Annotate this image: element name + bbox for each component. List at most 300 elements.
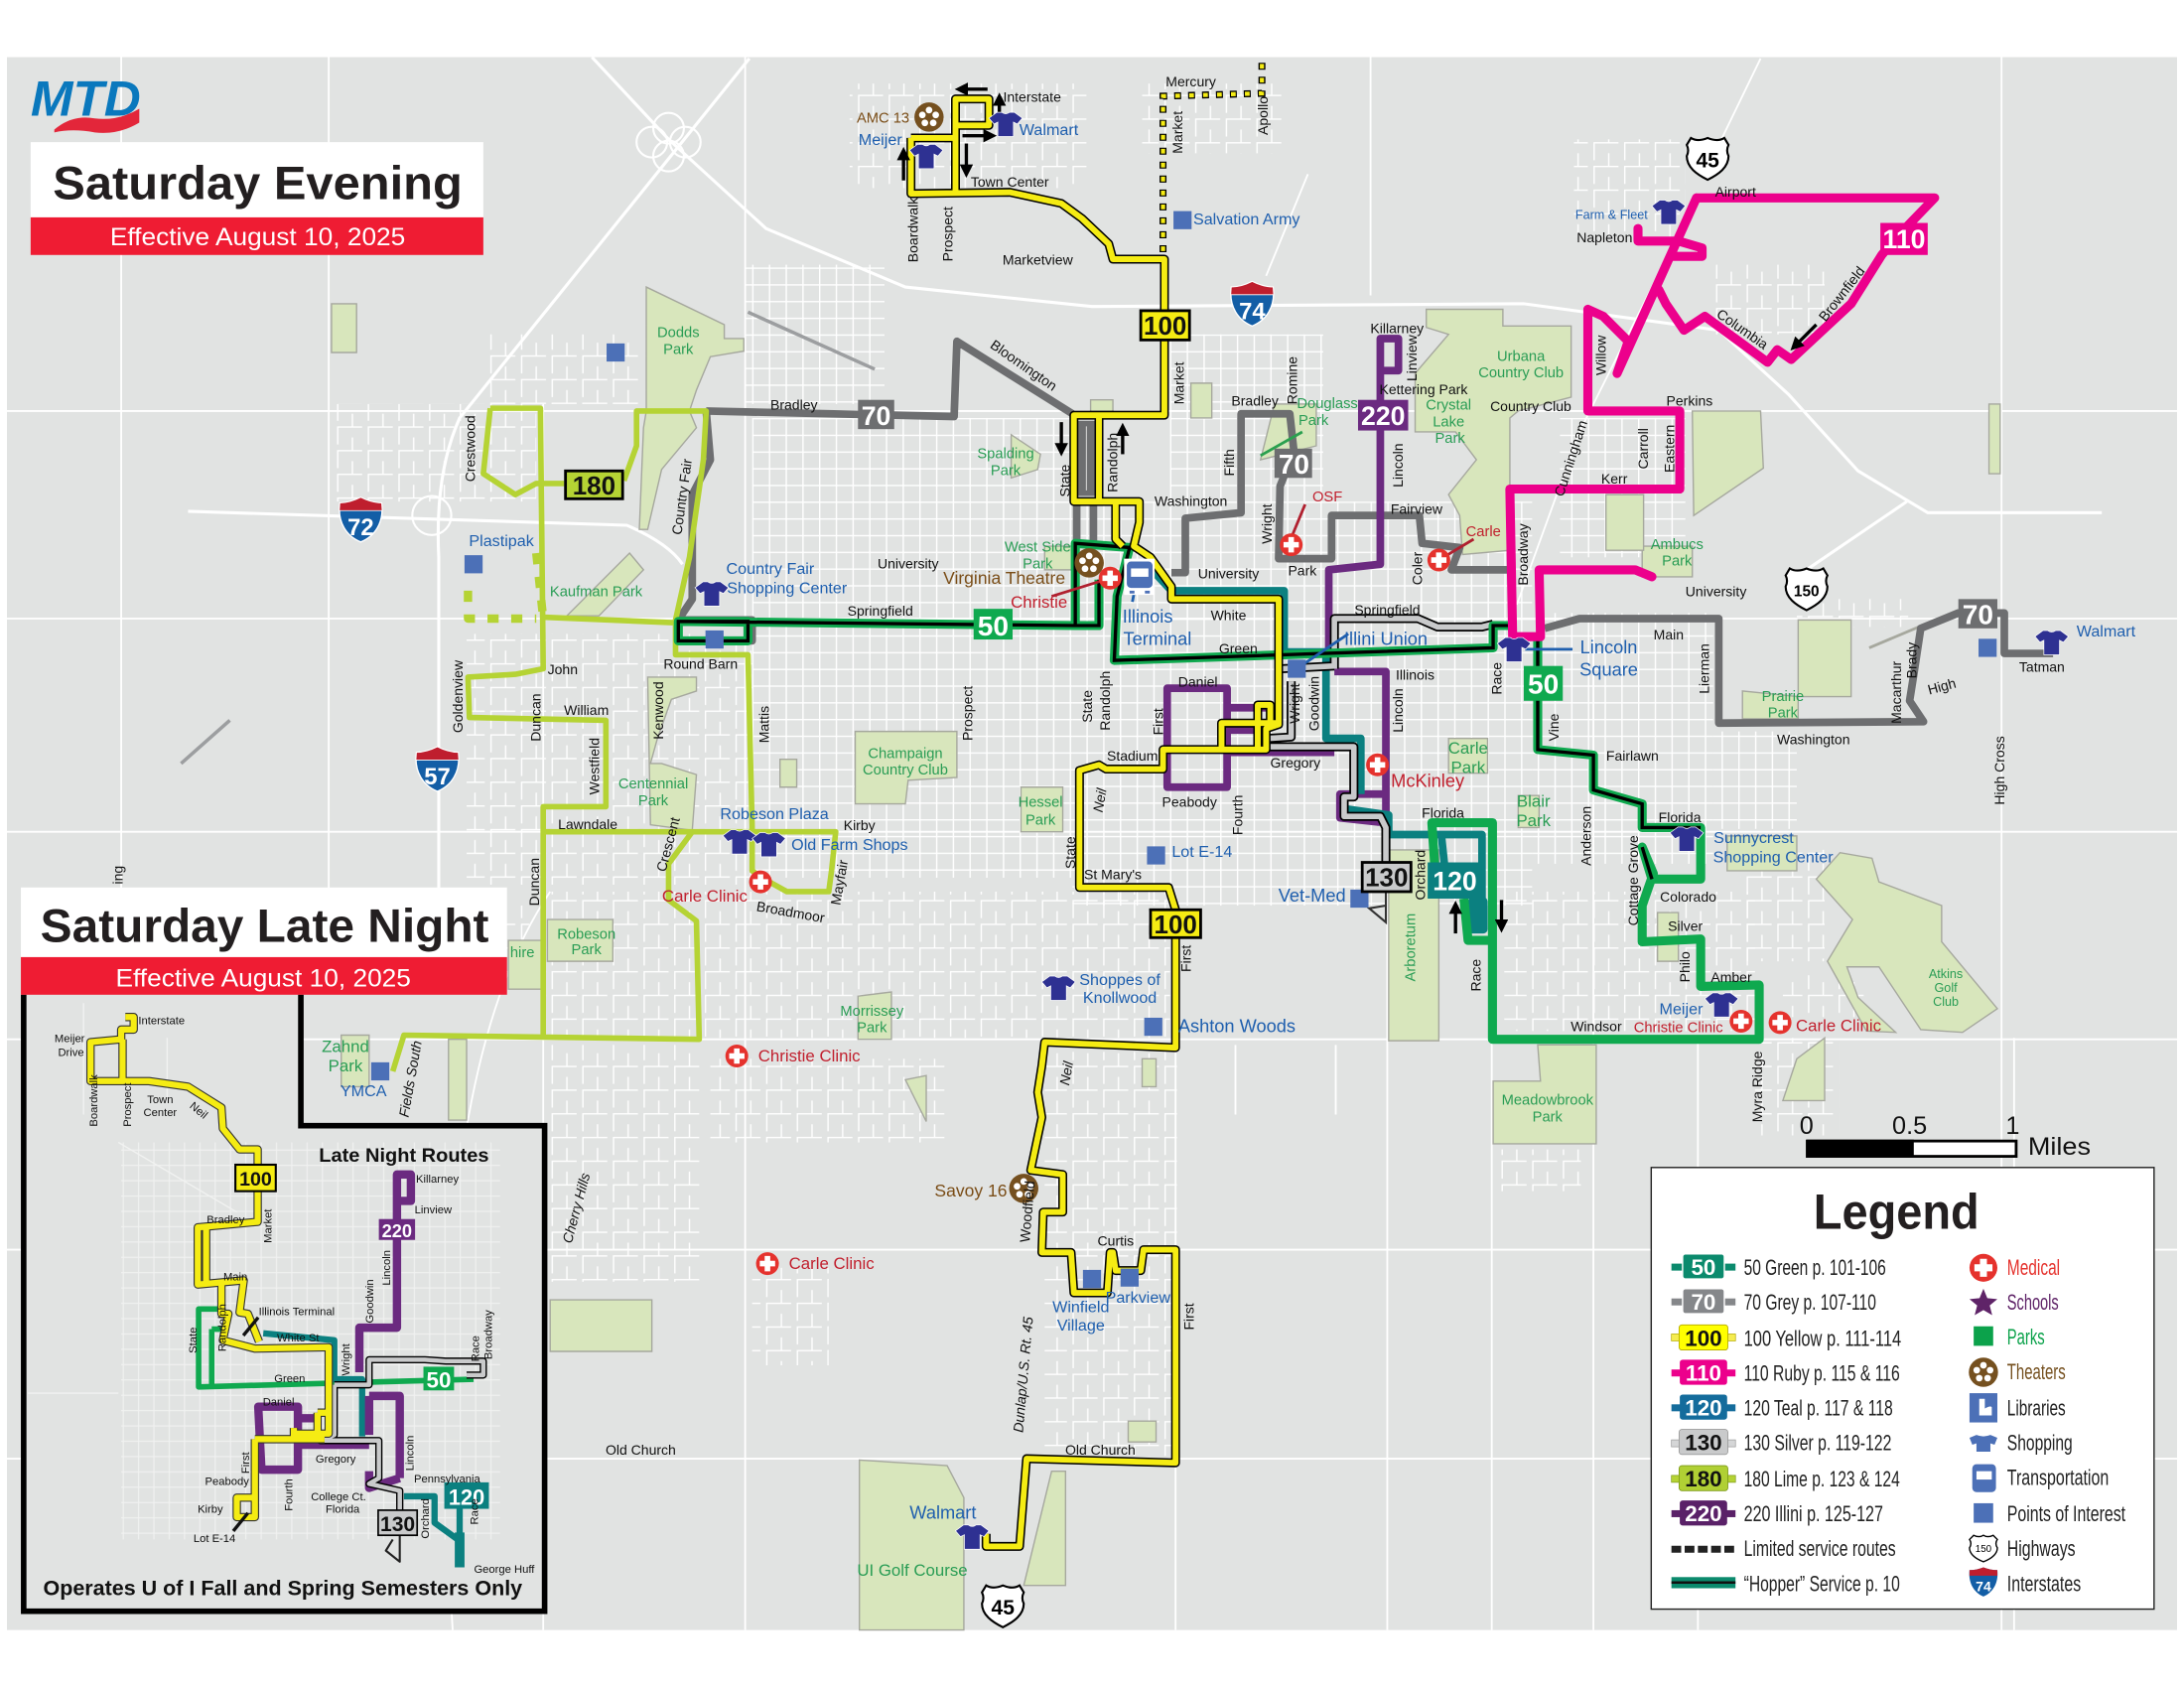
street labels: Florida (1422, 805, 1464, 821)
street labels: Duncan (527, 693, 543, 742)
inset street labels: College Ct. (311, 1491, 366, 1503)
street labels: Curtis (1098, 1232, 1134, 1248)
inset street labels: Killarney (416, 1174, 459, 1186)
street labels: Fairlawn (1606, 748, 1659, 764)
inset street labels: Drive (58, 1048, 84, 1059)
inset street labels: Main (223, 1271, 247, 1283)
street labels: Philo (1677, 951, 1693, 982)
street labels: Apollo (1255, 96, 1271, 135)
inset street labels: Randolph (216, 1304, 228, 1351)
icon: transit center (1124, 559, 1155, 595)
place labels: shopping and points of interest: Plastipak (469, 532, 535, 550)
street labels: Broadmoor (755, 898, 826, 925)
route 130 silver (1268, 619, 1493, 922)
street labels: Fourth (1230, 795, 1246, 835)
legend symbol text: Highways (2007, 1536, 2076, 1561)
street labels: Myra Ridge (1749, 1051, 1765, 1122)
inset route labels: 120 (449, 1484, 484, 1509)
street labels: Country Fair (668, 458, 695, 536)
place labels: parks: Blair (1517, 791, 1551, 810)
highway shields: 45 (1696, 149, 1719, 172)
shopping icons (695, 112, 2069, 1549)
theaters (914, 102, 1104, 1203)
place labels: parks: Prairie (1762, 689, 1804, 705)
street labels: Daniel (1178, 674, 1217, 690)
route number labels: 70 (1279, 449, 1309, 480)
street labels: Mattis (755, 706, 771, 743)
route number labels (566, 223, 1997, 939)
street labels: University (1686, 584, 1746, 600)
inset street labels: Prospect (122, 1082, 134, 1127)
place labels: shopping and points of interest: Lincoln (1580, 636, 1637, 657)
place labels: shopping and points of interest: Robeson Plaza (720, 805, 829, 823)
place labels: parks: Park (638, 793, 669, 809)
place labels: shopping and points of interest: Knollwood (1083, 989, 1157, 1007)
inset street labels: Town (147, 1094, 173, 1106)
place labels: shopping and points of interest: Shopping Center (1713, 849, 1834, 867)
place labels: shopping and points of interest: Meijer (859, 131, 902, 149)
place labels: medical (662, 490, 1881, 1273)
street labels: Willow (1593, 335, 1609, 375)
legend route text: 120 Teal p. 117 & 118 (1744, 1396, 1893, 1421)
street labels: Neil (1090, 786, 1110, 813)
inset street labels: Pennsylvania (414, 1474, 481, 1485)
scale bar: 1 (2005, 1112, 2019, 1140)
place labels: medical: Christie Clinic (1634, 1021, 1723, 1037)
route number labels: 220 (1361, 401, 1405, 431)
place labels: shopping and points of interest (341, 121, 2136, 1522)
place labels: parks: Country Club (863, 763, 948, 778)
inset street labels: Meijer (55, 1034, 85, 1046)
route 120 teal (1154, 571, 1487, 933)
highway shields: 74 (1239, 298, 1266, 325)
route number labels: 100 (1155, 912, 1197, 939)
street labels: Tatman (2019, 658, 2065, 674)
street labels: St Mary's (1084, 866, 1142, 882)
place labels: parks: Park (1451, 759, 1486, 777)
street labels: Lincoln (1390, 443, 1406, 488)
legend symbol text: Schools (2007, 1290, 2059, 1315)
route number labels: 100 (1144, 313, 1186, 341)
inset street labels: First (240, 1451, 252, 1474)
street labels: Airport (1715, 184, 1756, 200)
legend route badges: 100 (1685, 1326, 1722, 1350)
route number labels: 50 (1528, 669, 1559, 700)
place labels: medical: Christie (1011, 593, 1067, 612)
street labels: Old Church (606, 1442, 676, 1458)
street labels: Windsor (1570, 1018, 1622, 1034)
street labels: Kettering Park (1380, 381, 1468, 397)
street labels: State (1079, 690, 1095, 723)
highway shields: 45 (992, 1597, 1015, 1619)
title: Saturday Evening: Effective August 10, 2025 (110, 223, 405, 251)
inset street labels: Wright (341, 1342, 352, 1376)
inset street labels: Center (144, 1107, 177, 1119)
place labels: parks: Lake (1433, 414, 1464, 430)
legend symbol text: Transportation (2007, 1466, 2109, 1490)
place labels: shopping and points of interest: Walmart (1020, 121, 1079, 139)
street labels: Wright (1287, 683, 1302, 724)
place labels: parks: Zahnd (322, 1037, 369, 1055)
street labels: Round Barn (663, 655, 738, 671)
street labels: Romine (1284, 356, 1299, 404)
place labels: parks: Centennial (618, 776, 688, 792)
street labels: Linview (1404, 334, 1420, 381)
street labels: High Cross (1991, 736, 2007, 805)
street labels: First (1180, 1303, 1196, 1331)
street labels: ing (109, 866, 125, 885)
place labels: shopping and points of interest: Walmart (2077, 623, 2136, 640)
place labels: parks: Park (1298, 413, 1329, 429)
street labels: Race (1467, 959, 1483, 992)
place labels: parks: Dodds (657, 326, 700, 342)
place labels: shopping and points of interest: Old Farm Shops (791, 836, 908, 854)
place labels: parks: Country Club (1478, 365, 1564, 381)
street labels: Westfield (586, 738, 602, 794)
inset street labels: Neil (188, 1100, 209, 1122)
inset route labels: 50 (426, 1367, 451, 1392)
place labels: parks: Robeson (557, 927, 615, 943)
street labels: William (564, 702, 609, 718)
street labels: Crescent (653, 815, 683, 874)
place labels: shopping and points of interest: Farm & Fleet (1575, 208, 1648, 221)
street labels: Crestwood (462, 415, 478, 482)
street labels: Bradley (1231, 392, 1279, 408)
street labels: Randolph (1104, 433, 1120, 492)
title: Saturday Evening: Saturday Evening (53, 158, 463, 211)
inset route lines (90, 1017, 483, 1567)
route number labels: 180 (573, 473, 615, 500)
legend route text: 130 Silver p. 119-122 (1744, 1431, 1891, 1456)
street labels: Goodwin (1306, 676, 1322, 731)
place labels: parks: Atkins (1929, 967, 1963, 981)
legend route badges: 110 (1686, 1360, 1721, 1385)
street labels: University (1198, 565, 1259, 581)
logo: MTD: MTD (31, 70, 141, 126)
legend route text (1744, 1255, 1901, 1596)
legend symbol text: Shopping (2007, 1431, 2073, 1456)
street labels: Goldenview (450, 659, 466, 733)
inset street labels: Boardwalk (88, 1074, 100, 1127)
street labels: Lincoln (1390, 688, 1406, 733)
street labels: Cherry Hills (559, 1172, 593, 1245)
place labels: shopping and points of interest: Parkview (1106, 1289, 1170, 1307)
street labels: Broadway (1515, 523, 1531, 586)
inset street labels: White St (277, 1333, 320, 1344)
street labels: Bloomington (988, 337, 1060, 394)
inset street labels: Daniel (263, 1397, 295, 1409)
title: Saturday Late Night (21, 888, 507, 995)
street labels: Colorado (1660, 889, 1716, 905)
street labels: First (1178, 945, 1194, 972)
place labels: parks: Meadowbrook (1502, 1093, 1594, 1109)
street labels: Old Church (1065, 1442, 1136, 1458)
place labels: parks: Park (329, 1056, 363, 1075)
street labels: Prospect (940, 207, 956, 261)
place labels: parks: Carle (1448, 739, 1488, 758)
inset street labels: Florida (326, 1504, 360, 1516)
place labels: parks: West Side (1005, 540, 1071, 556)
legend symbol text: Points of Interest (2007, 1501, 2125, 1526)
place labels: shopping and points of interest: Walmart (909, 1501, 976, 1522)
place labels: parks: Park (1516, 811, 1552, 830)
place labels: parks: Park (572, 942, 602, 958)
street labels: Neil (1056, 1059, 1076, 1086)
inset street labels: Market (263, 1208, 275, 1243)
leader lines (1051, 432, 1572, 668)
street labels: Fifth (1221, 449, 1237, 476)
highway shields: 72 (347, 514, 374, 541)
street labels: Park (1288, 562, 1317, 578)
street labels: Mayfair (827, 858, 851, 907)
inset street labels: Lincoln (381, 1250, 393, 1286)
street labels: State (1057, 465, 1073, 496)
legend route badges: 180 (1685, 1467, 1722, 1491)
place labels: shopping and points of interest: Terminal (1124, 629, 1191, 649)
place labels: parks: Park (857, 1021, 887, 1037)
inset street labels: Linview (415, 1204, 453, 1216)
inset street labels: Illinois Terminal (259, 1307, 335, 1319)
street labels: Lierman (1697, 643, 1712, 694)
street labels: Race (1489, 662, 1504, 695)
place labels: parks: Spalding (977, 447, 1034, 463)
street labels: Washington (1155, 492, 1227, 508)
street labels: Kerr (1601, 471, 1628, 487)
place labels: shopping and points of interest: Illinois (1123, 606, 1172, 627)
street labels: Stadium (1107, 748, 1158, 764)
legend route text: 110 Ruby p. 115 & 116 (1744, 1360, 1900, 1385)
place labels: theaters: AMC 13 (857, 110, 909, 126)
route 100 yellow (911, 62, 1279, 1546)
street labels: Market (1171, 361, 1187, 404)
highway shields: 57 (424, 764, 451, 790)
street labels: Cottage Grove (1625, 835, 1641, 925)
route 50 green with hopper line (678, 543, 1759, 1040)
street labels: Lawndale (558, 816, 617, 832)
place labels: medical: Carle (1466, 524, 1501, 540)
legend route badges: 220 (1685, 1501, 1722, 1526)
place labels: shopping and points of interest: Sunnycrest (1713, 829, 1794, 847)
legend symbol text: Medical (2007, 1255, 2060, 1280)
place labels: parks: Park (1025, 813, 1056, 829)
place labels: medical: Carle Clinic (1796, 1016, 1881, 1035)
place labels: parks: Park (1662, 554, 1693, 570)
place labels: parks: Crystal (1426, 398, 1471, 414)
inset street labels: Goodwin (364, 1279, 376, 1324)
route 180 lime (393, 408, 836, 1071)
street labels (109, 73, 2065, 1458)
place labels: parks: Ambucs (1651, 537, 1704, 553)
inset route labels: 130 (380, 1513, 415, 1536)
legend route text: 70 Grey p. 107-110 (1744, 1290, 1876, 1315)
street labels: Amber (1710, 969, 1752, 985)
place labels: parks: Golf (1935, 981, 1958, 995)
street labels: Washington (1777, 731, 1850, 747)
street labels: First (1151, 708, 1166, 735)
street labels: Main (1654, 627, 1684, 642)
place labels: parks: Morrissey (840, 1004, 904, 1020)
street labels: Coler (1410, 551, 1426, 585)
place labels: shopping and points of interest: Village (1057, 1317, 1105, 1335)
place labels: parks: Club (1933, 995, 1959, 1009)
place labels: shopping and points of interest: Lot E-14 (1171, 843, 1232, 861)
street labels: Fields South (396, 1040, 425, 1118)
street labels: White (1211, 607, 1247, 623)
inset street labels: Green (274, 1373, 305, 1385)
place labels: medical: McKinley (1391, 771, 1465, 791)
place labels: medical: OSF (1312, 490, 1342, 505)
place labels: parks: Arboretum (1404, 914, 1420, 981)
inset street labels: State (188, 1328, 200, 1353)
place labels: parks (322, 326, 1963, 1580)
place labels: shopping and points of interest: Vet-Med (1279, 885, 1346, 906)
inset street labels: Bradley (206, 1214, 245, 1226)
inset street labels (55, 1015, 535, 1576)
inset street labels: Lincoln (405, 1436, 417, 1471)
place labels: parks: Park (1023, 556, 1053, 572)
legend symbol text: Parks (2007, 1325, 2045, 1349)
scale bar: 0 (1800, 1112, 1814, 1140)
street labels: Illinois (1396, 667, 1434, 683)
place labels: shopping and points of interest: Shopping Center (727, 580, 848, 598)
street labels: Kenwood (650, 681, 666, 740)
legend symbols: 150 (1976, 1544, 1992, 1555)
route number labels: 130 (1365, 864, 1408, 892)
place labels: parks: Urbana (1497, 349, 1546, 364)
legend route text: 50 Green p. 101-106 (1744, 1255, 1886, 1280)
place labels: parks: Hessel (1019, 794, 1063, 810)
title: Saturday Late Night: Effective August 10, 2025 (115, 964, 411, 992)
street labels: Duncan (526, 858, 542, 906)
inset street labels: Race (471, 1336, 482, 1361)
street labels: Market (1169, 111, 1185, 154)
place labels: theaters: Savoy 16 (934, 1181, 1007, 1200)
heading: Late Night Routes: Late Night Routes (319, 1145, 489, 1167)
street labels: Marketview (1003, 252, 1074, 268)
street labels: Interstate (1003, 88, 1061, 104)
street labels: Silver (1668, 917, 1704, 933)
title: Saturday Evening (31, 142, 483, 255)
street labels: Boardwalk (905, 197, 921, 262)
inset street labels: Orchard (420, 1498, 432, 1539)
legend route badges: 120 (1685, 1396, 1722, 1421)
route number labels: 50 (978, 611, 1009, 641)
place labels: theaters (857, 110, 1065, 1200)
points of interest (371, 211, 1996, 1288)
route number labels: 120 (1433, 867, 1477, 897)
place labels: shopping and points of interest: Winfield (1052, 1299, 1109, 1317)
scale bar: 0.5 (1892, 1112, 1927, 1140)
street labels: Dunlap/U.S. Rt. 45 (1010, 1316, 1036, 1433)
place labels: medical: Carle Clinic (662, 887, 748, 906)
legend symbol text: Libraries (2007, 1396, 2066, 1421)
legend route badges: 50 (1691, 1255, 1715, 1280)
highway shields (340, 138, 1828, 1627)
parks (332, 287, 2000, 1630)
street labels: Anderson (1577, 806, 1593, 866)
street labels: Columbia (1713, 306, 1771, 352)
street labels: Country Club (1490, 398, 1571, 414)
highway shields: 150 (1794, 584, 1820, 601)
route 70 grey (678, 342, 2053, 723)
place labels: parks: Park (1533, 1109, 1564, 1125)
street labels: Peabody (1162, 793, 1217, 809)
legend route badges: 130 (1685, 1431, 1722, 1456)
route number labels: 70 (1963, 600, 1993, 631)
street labels: Perkins (1667, 392, 1712, 408)
street labels: Randolph (1097, 671, 1113, 731)
place labels: shopping and points of interest: Square (1579, 659, 1638, 680)
place labels: shopping and points of interest: Shoppes of (1079, 971, 1160, 989)
place labels: parks: Park (1768, 706, 1799, 722)
place labels: parks: Champaign (868, 746, 943, 762)
street labels: Killarney (1370, 320, 1424, 336)
inset street labels: Race (469, 1498, 480, 1524)
legend symbols: 74 (1976, 1578, 1991, 1594)
place labels: shopping and points of interest: Salvation Army (1193, 211, 1300, 228)
route number labels: 110 (1882, 224, 1925, 254)
inset street labels: Fourth (284, 1478, 296, 1511)
inset street labels: Broadway (482, 1310, 494, 1359)
inset street labels: Lot E-14 (194, 1533, 235, 1545)
panel: legend (1651, 1168, 2154, 1610)
place labels: medical: Carle Clinic (789, 1254, 875, 1273)
street labels: State (1062, 836, 1078, 869)
street labels: Carroll (1635, 428, 1651, 469)
street labels: John (548, 661, 578, 677)
place labels: shopping and points of interest: Meijer (1660, 1000, 1704, 1018)
street labels: Macarthur (1888, 660, 1904, 724)
scale bar (1800, 1112, 2091, 1161)
place labels: medical: Christie Clinic (758, 1047, 861, 1065)
street labels: Kirby (844, 817, 876, 833)
street labels: Brownfield (1816, 263, 1868, 325)
street labels: Springfield (1354, 602, 1421, 618)
route 110 ruby (1510, 198, 1935, 636)
legend symbol text (2007, 1255, 2125, 1596)
street labels: Green (1219, 640, 1258, 656)
street labels: Wright (1259, 503, 1275, 544)
route 220 purple (1167, 339, 1399, 822)
legend symbol text: Theaters (2007, 1359, 2066, 1384)
place labels: shopping and points of interest: Ashton Woods (1178, 1016, 1296, 1037)
legend route badges (1672, 1254, 1735, 1589)
medical icons (726, 533, 1792, 1275)
legend heading: Legend (1814, 1184, 1979, 1240)
street labels: High (1926, 675, 1958, 698)
street labels: Town Center (971, 174, 1049, 190)
street labels: Woodfield (1017, 1181, 1037, 1243)
place labels: parks: Park (991, 463, 1022, 479)
street labels: Fairview (1391, 501, 1443, 517)
inset route labels: 220 (382, 1220, 412, 1241)
legend route text: 220 Illini p. 125-127 (1744, 1501, 1883, 1526)
inset street labels: Kirby (198, 1504, 223, 1516)
street labels: Brady (1904, 642, 1920, 678)
street labels: Florida (1659, 809, 1702, 825)
place labels: theaters: Virginia Theatre (943, 568, 1065, 588)
inset route labels (235, 1165, 488, 1536)
inset street labels: George Huff (474, 1564, 535, 1576)
street labels: Springfield (848, 603, 913, 619)
place labels: shopping and points of interest: Country Fair (727, 560, 815, 578)
street labels: Mercury (1165, 73, 1216, 89)
street labels: University (878, 555, 939, 571)
note: semesters: Operates U of I Fall and Spring Semesters Only (43, 1578, 522, 1601)
place labels: parks: Kaufman Park (550, 585, 643, 601)
legend route text: “Hopper” Service p. 10 (1744, 1571, 1900, 1596)
street labels: Bradley (770, 397, 818, 413)
